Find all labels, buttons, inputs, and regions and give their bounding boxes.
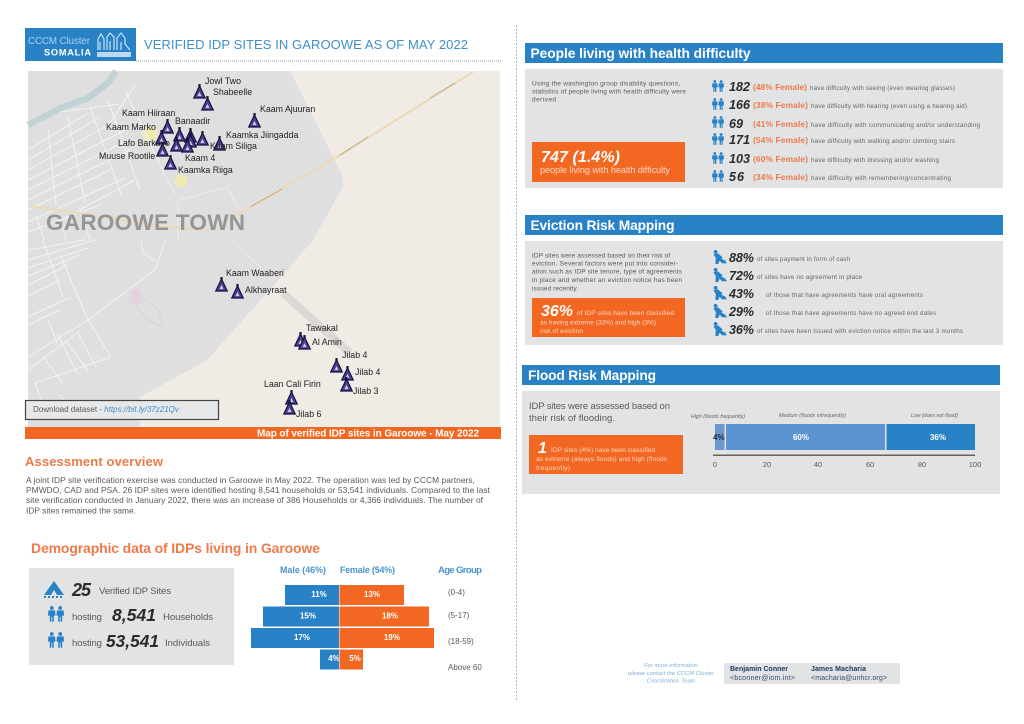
callout: 36%: as having extreme (33%) and high (3%) <box>540 320 656 326</box>
panel: key figures: 25 <box>71 580 92 600</box>
row: hearing <box>712 98 967 112</box>
header: people living with health difficulty: People living with health difficulty <box>530 46 751 61</box>
callout: 36%: 36% <box>541 303 573 320</box>
panel: key figures: Individuals <box>165 638 210 649</box>
callout: 36%: risk of eviction <box>540 328 583 335</box>
site name labels: Banaadir <box>175 116 210 126</box>
site name labels: Al Amin <box>312 337 342 347</box>
site name labels <box>99 76 381 419</box>
callout: 1 site <box>529 435 683 474</box>
row: communicating: 69 <box>729 117 743 131</box>
panel: key figures: 53,541 <box>106 631 159 651</box>
site name labels: Kaam Ajuuran <box>260 104 315 114</box>
panel: key figures <box>29 568 234 665</box>
assessment overview text: site verification conducted in January 2022, there was an increase of 386 Households or 4,366 individuals. The number of <box>26 495 484 505</box>
row: remembering: 56 <box>729 170 745 184</box>
intro text: derived <box>532 96 556 104</box>
chart: population pyramid: (0-4) <box>448 588 465 597</box>
row: no agreement: 72% <box>729 269 754 283</box>
callout: 1 site: 1 <box>538 440 547 457</box>
row: no end dates <box>713 304 936 319</box>
row: oral agreements <box>713 286 923 301</box>
callout: 1 site: frequently) <box>536 465 570 472</box>
row: oral agreements: 43% <box>728 287 754 301</box>
assessment overview text: IDP sites remained the same. <box>26 506 136 516</box>
download dataset box: Download dataset - https://bit.ly/37z21Qv <box>33 405 180 414</box>
site name labels: Jilab 3 <box>353 386 379 396</box>
chart: flood risk stacked bar: High (floods frequently) <box>691 414 745 420</box>
callout: 36%: of IDP sites have been classified <box>577 310 674 317</box>
row: walking: have difficulty with walking and/or climbing stairs <box>811 138 955 145</box>
chart: population pyramid: 13% <box>364 590 380 599</box>
chart: population pyramid: Age Group <box>438 565 482 576</box>
callout: 747 people: 747 (1.4%) <box>541 149 620 166</box>
callout: 1 site: IDP sites (4%) have been classified <box>551 447 655 454</box>
chart: flood risk stacked bar: 20 <box>763 460 771 469</box>
heading: demographic data: Demographic data of IDPs living in Garoowe <box>31 540 320 556</box>
chart: flood risk stacked bar: 0 <box>713 460 717 469</box>
site name labels: Alkhayraat <box>245 285 287 295</box>
row: communicating: (41% Female) <box>753 119 808 129</box>
flood intro text <box>529 401 670 424</box>
panel: key figures: hosting <box>72 612 102 623</box>
panel: key figures: 8,541 <box>112 605 156 625</box>
chart: population pyramid: 15% <box>300 612 316 620</box>
chart: population pyramid: (18-59) <box>448 637 474 646</box>
row: dressing: (60% Female) <box>753 154 808 164</box>
title: VERIFIED IDP SITES IN GAROOWE AS OF MAY 2022 <box>144 37 468 52</box>
chart: population pyramid: (5-17) <box>448 611 470 620</box>
intro text: statistics of people living with health difficulty were <box>532 88 686 96</box>
row: payment in cash <box>713 250 851 265</box>
row: payment in cash: 88% <box>729 251 754 265</box>
row: eviction notice <box>713 322 963 337</box>
chart: flood risk stacked bar: 60% <box>793 433 809 442</box>
assessment overview text: PMWDO, CAD and PSA. 26 IDP sites were identified hosting 8,541 households or 53,541 individuals. Compared to the last <box>26 485 491 495</box>
row: no end dates: of those that have agreements have no agreed end dates <box>766 310 936 317</box>
site name labels: Jilab 4 <box>342 350 368 360</box>
heading: assessment overview: Assessment overview <box>25 454 164 469</box>
contact note <box>627 663 715 684</box>
row: no end dates: 29% <box>728 305 754 319</box>
chart: population pyramid: 18% <box>382 612 398 620</box>
flood intro text: IDP sites were assessed based on <box>529 401 670 412</box>
row: remembering <box>712 170 952 184</box>
logo: CCCM Cluster Somalia: CCCM Cluster <box>28 36 91 47</box>
site name labels: Kaamka Riiga <box>178 165 233 175</box>
site name labels: Shabeelle <box>213 87 252 97</box>
row: oral agreements: of those that have agreements have oral agreements <box>766 292 923 299</box>
panel: health difficulty <box>525 69 1003 188</box>
IDP site markers <box>156 84 353 414</box>
contacts box: <bconner@iom.int> <box>730 675 795 682</box>
site name labels: Lafo Barkavo <box>118 138 170 148</box>
row: dressing: have difficulty with dressing and/or washing <box>811 157 940 164</box>
row: hearing: (38% Female) <box>753 100 808 110</box>
chart: population pyramid: 11% <box>311 590 327 599</box>
row: seeing: have difficulty with seeing (even wearing glasses) <box>810 85 955 92</box>
header: eviction risk mapping <box>525 215 1003 235</box>
chart: population pyramid: Female (54%) <box>340 565 395 575</box>
intro text: in place and whether an eviction notice has been <box>532 277 682 284</box>
row: hearing: have difficulty with hearing (even using a hearing aid) <box>811 103 967 110</box>
callout: 36% <box>532 298 685 337</box>
intro text: IDP sites were assessed based on their risk of <box>532 252 670 260</box>
assessment overview text: A joint IDP site verification exercise was conducted in Garoowe in May 2022. The operation was led by CCCM partners, <box>26 475 475 485</box>
header: people living with health difficulty <box>525 43 1003 63</box>
site name labels: Kaam 4 <box>185 153 215 163</box>
chart: population pyramid <box>251 565 482 672</box>
header: eviction risk mapping: Eviction Risk Mapping <box>530 218 674 233</box>
row: communicating: have difficulty with communicating and/or understanding <box>811 122 981 129</box>
contacts box: Benjamin Conner <box>730 666 788 673</box>
row: seeing <box>712 80 955 94</box>
map of verified IDP sites <box>28 71 500 427</box>
chart: flood risk stacked bar: 40 <box>814 460 822 469</box>
intro text: eviction. Several factors were put into consider- <box>532 260 678 268</box>
icon: family <box>48 632 64 648</box>
header: flood risk mapping: Flood Risk Mapping <box>528 368 656 383</box>
row: walking: (54% Female) <box>753 135 808 145</box>
intro text: Using the washington group disability questions, <box>532 80 680 88</box>
row: eviction notice: of sites have been issued with eviction notice within the last 3 months <box>757 328 963 335</box>
chart: flood risk stacked bar: 36% <box>930 433 946 442</box>
panel: key figures: hosting <box>72 638 102 649</box>
panel: key figures: Households <box>163 612 213 623</box>
callout: 1 site: as extreme (always floods) and high (floods <box>536 456 668 463</box>
row: communicating <box>712 116 981 131</box>
site name labels: Kaam Siliga <box>210 141 257 151</box>
contact note: For more information <box>644 663 698 669</box>
row: payment in cash: of sites payment in form of cash <box>757 256 851 263</box>
callout: 747 people <box>532 142 685 182</box>
site name labels: Laan Cali Firin <box>264 379 321 389</box>
map caption bar <box>25 427 501 440</box>
chart: flood risk stacked bar: 100 <box>969 460 981 469</box>
panel: flood risk <box>522 391 1000 494</box>
panel: key figures: Verified IDP Sites <box>99 586 171 597</box>
site name labels: Jilab 6 <box>296 409 322 419</box>
intro text <box>532 252 683 292</box>
row: dressing <box>712 152 940 166</box>
chart: population pyramid: 5% <box>349 654 361 663</box>
site name labels: Jilab 4 <box>355 367 381 377</box>
row: no agreement: of sites have no agreement in place <box>757 274 863 281</box>
map of verified IDP sites: GAROOWE TOWN <box>46 210 245 235</box>
site name labels: Jowl Two <box>205 76 241 86</box>
chart: flood risk stacked bar: Low (does not flood) <box>911 413 958 419</box>
row: remembering: have difficulty with remembering/concentrating <box>811 175 952 182</box>
contacts box: James Macharia <box>811 666 866 673</box>
panel: eviction risk <box>525 241 1003 345</box>
header: flood risk mapping <box>522 365 1000 385</box>
row: eviction notice: 36% <box>729 323 754 337</box>
row: seeing: (48% Female) <box>753 82 807 92</box>
contact note: Coordination Team <box>647 678 696 684</box>
row: seeing: 182 <box>729 80 750 94</box>
site name labels: Kaam Hiiraan <box>122 108 175 118</box>
chart: population pyramid: Above 60 <box>448 663 482 672</box>
site name labels: Muuse Rootile <box>99 151 155 161</box>
intro text: issued recently. <box>532 286 578 292</box>
site name labels: Kaamka Jiingadda <box>226 130 298 140</box>
intro text: ation such as IDP site tenure, type of agreements <box>532 268 683 276</box>
callout: 747 people: people living with health difficulty <box>540 165 670 175</box>
site name labels: Tawakal <box>306 323 338 333</box>
chart: flood risk stacked bar <box>691 413 981 469</box>
row: remembering: (34% Female) <box>753 172 808 182</box>
chart: population pyramid: 19% <box>384 633 400 642</box>
icon: family <box>48 606 64 622</box>
chart: flood risk stacked bar: 60 <box>866 460 874 469</box>
site name labels: Kaam Marko <box>106 122 156 132</box>
map caption bar: Map of verified IDP sites in Garoowe - May 2022 <box>257 428 479 440</box>
chart: population pyramid: 4% <box>328 654 340 663</box>
icon: tent <box>44 581 64 597</box>
chart: population pyramid: Male (46%) <box>280 565 326 575</box>
intro text <box>532 80 686 104</box>
flood intro text: their risk of flooding. <box>529 413 615 424</box>
row: walking <box>712 133 955 147</box>
logo: CCCM Cluster Somalia: SOMALIA <box>44 48 91 58</box>
assessment overview text <box>26 475 491 516</box>
row: walking: 171 <box>729 133 750 147</box>
row: no agreement <box>713 268 863 283</box>
site name labels: Kaam Waaberi <box>226 268 284 278</box>
contacts box: <macharia@unhcr.org> <box>811 675 887 682</box>
download dataset box <box>26 400 218 420</box>
logo: CCCM Cluster Somalia <box>25 28 136 61</box>
row: hearing: 166 <box>729 98 751 112</box>
contact note: please contact the CCCM Cluster <box>627 671 715 677</box>
contacts box <box>724 663 900 684</box>
row: dressing: 103 <box>729 152 750 166</box>
chart: population pyramid: 17% <box>294 633 310 642</box>
chart: flood risk stacked bar: Medium (floods infrequently) <box>779 413 846 419</box>
chart: flood risk stacked bar: 80 <box>918 460 926 469</box>
chart: flood risk stacked bar: 4% <box>713 433 725 442</box>
